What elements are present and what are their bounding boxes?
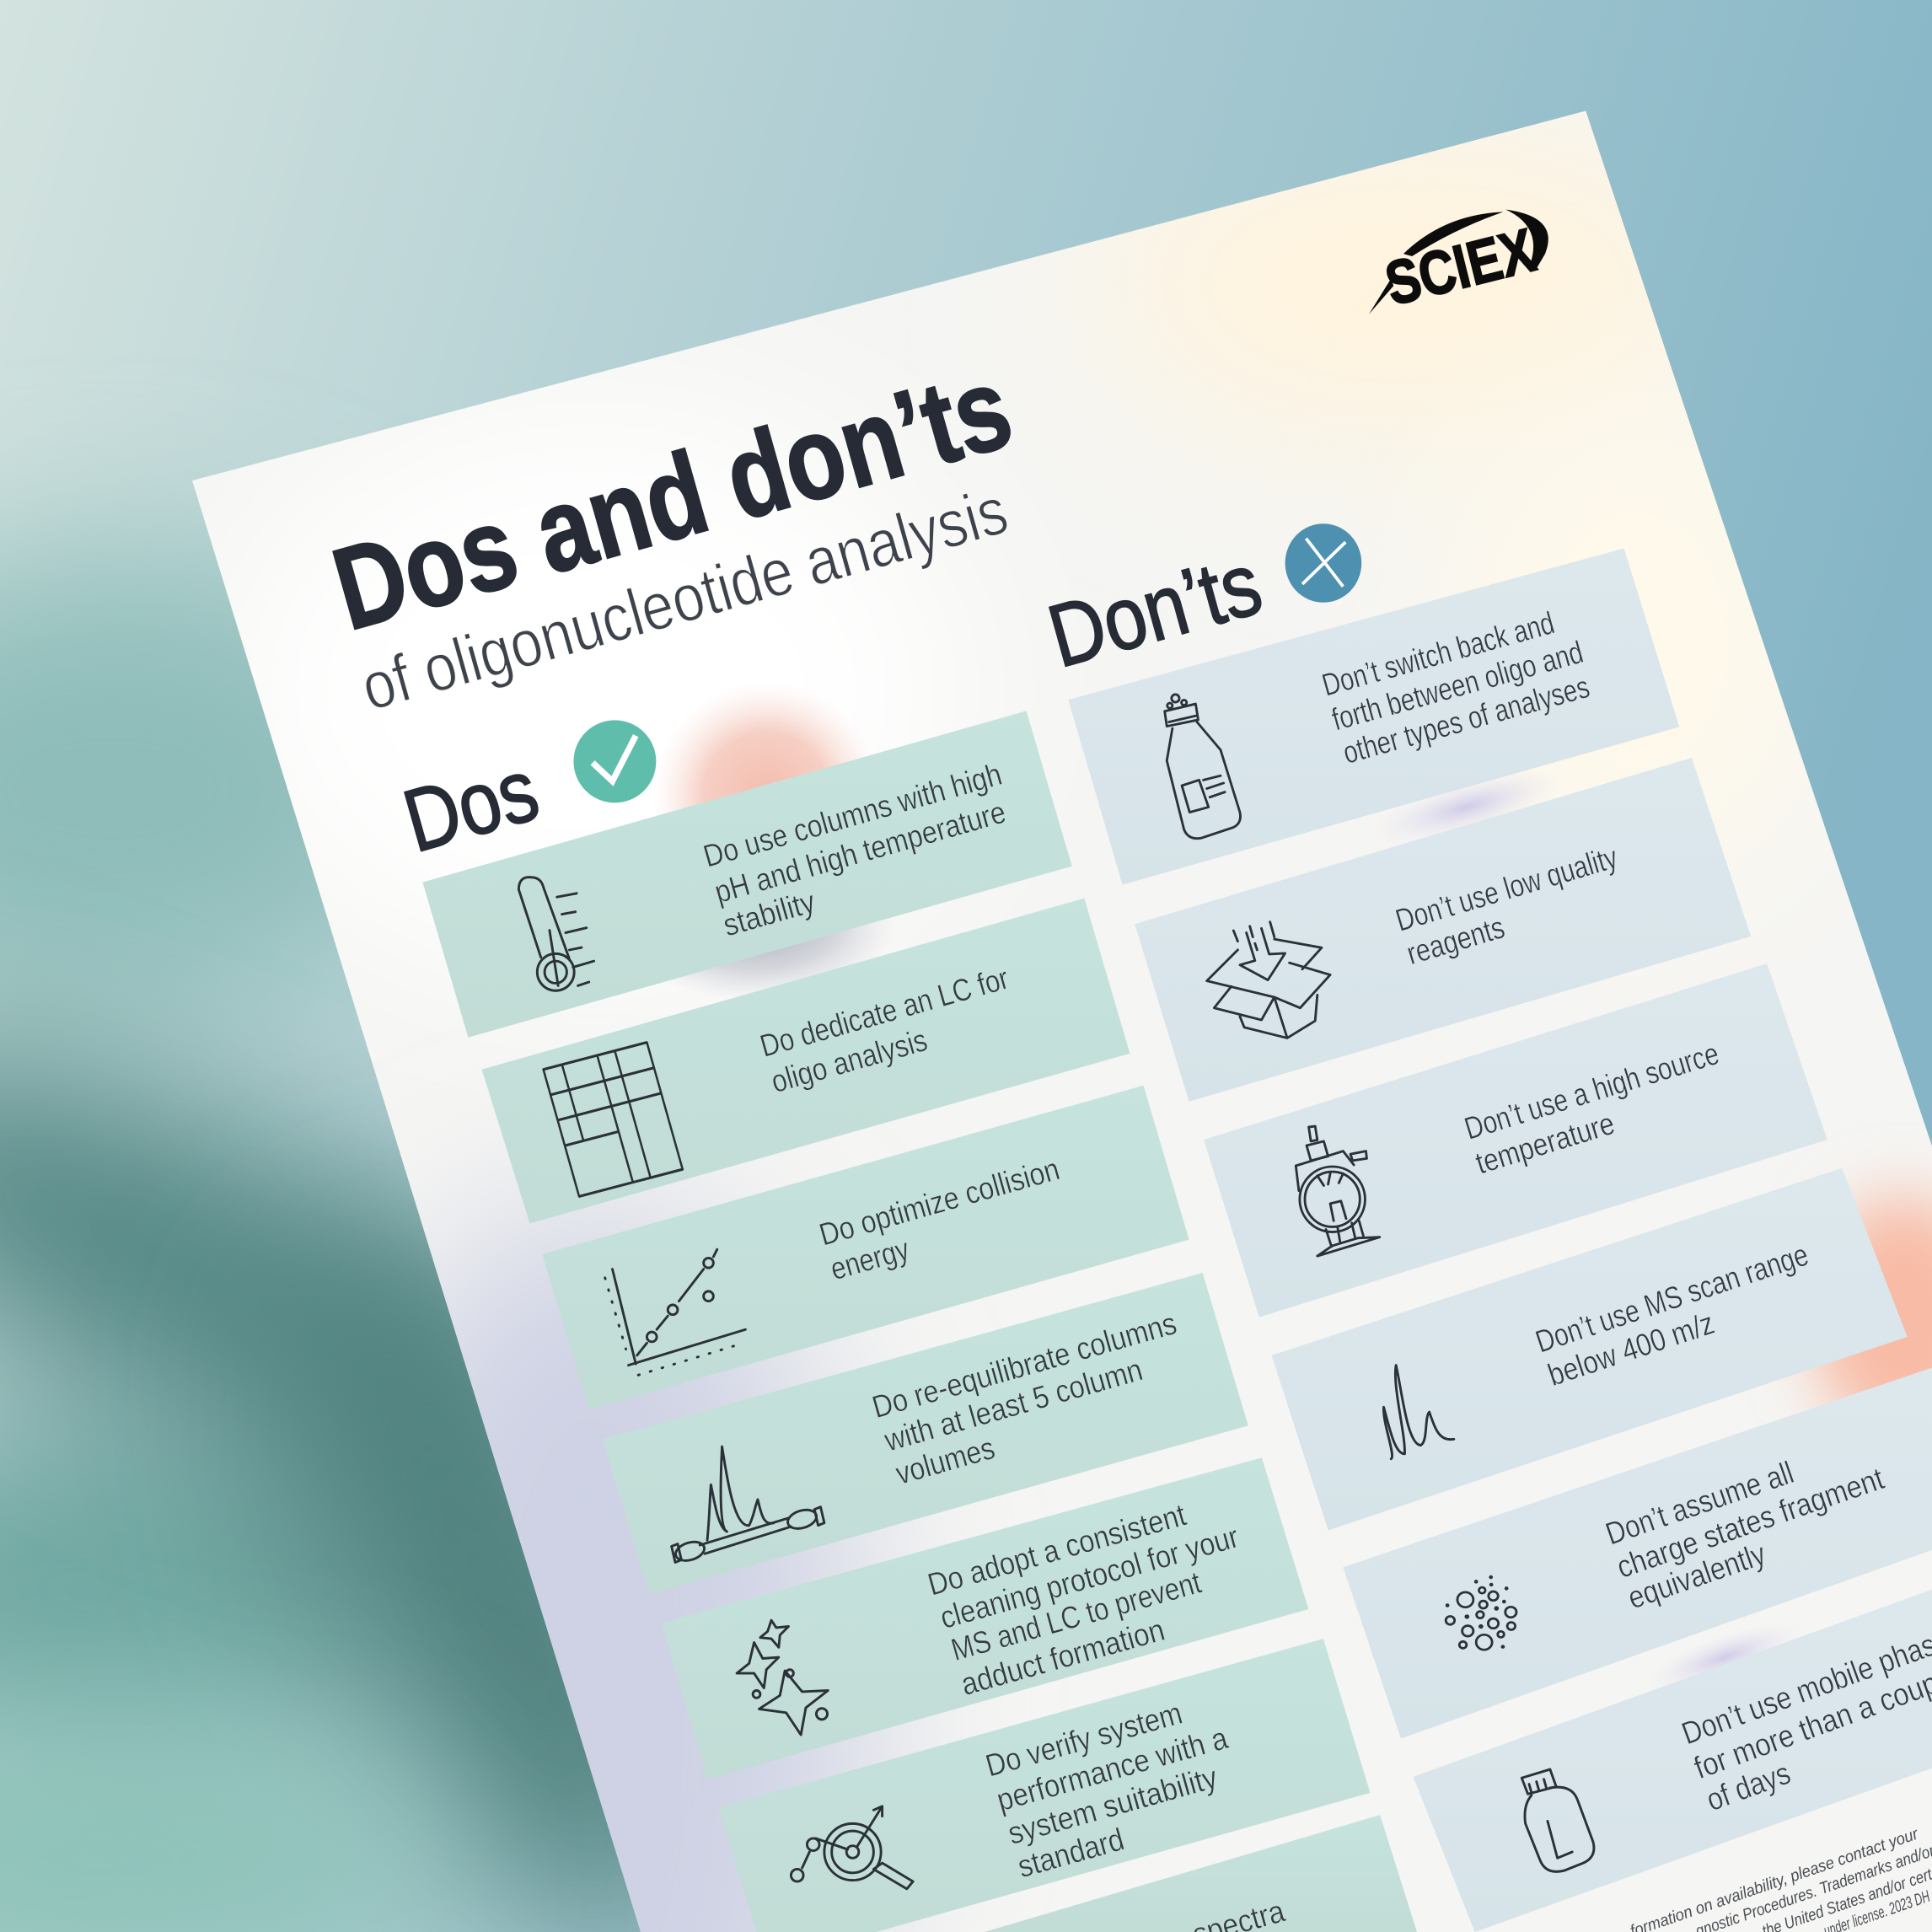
title: Dos and don’ts xyxy=(320,341,1024,655)
text: performance with a xyxy=(993,1720,1232,1817)
panel: don't 6 xyxy=(1414,1590,1932,1932)
text: stability xyxy=(719,883,819,943)
icon: check badge xyxy=(573,720,656,802)
text xyxy=(868,1305,1180,1491)
text: adduct formation xyxy=(957,1612,1168,1702)
text xyxy=(1531,1237,1812,1393)
text xyxy=(1318,604,1593,770)
icon: peaks xyxy=(1383,1366,1454,1459)
text: reagents xyxy=(1403,909,1508,971)
text xyxy=(700,756,1010,943)
panel: don't 3 xyxy=(1204,963,1827,1318)
text: system suitability xyxy=(1004,1759,1221,1851)
panel: don't 4 xyxy=(1272,1168,1908,1530)
icon: solvent bottle xyxy=(1165,695,1240,839)
text: Do optimize collision xyxy=(815,1151,1063,1253)
heading: Dos: Dos xyxy=(394,740,549,872)
text: Do verify system xyxy=(982,1695,1186,1784)
text xyxy=(756,960,1012,1099)
text: volumes xyxy=(892,1430,999,1491)
text xyxy=(1601,1454,1889,1616)
text: standard xyxy=(1014,1821,1128,1884)
text: other types of analyses xyxy=(1339,668,1593,770)
text: pH and high temperature xyxy=(711,794,1010,910)
text: Don’t switch back and xyxy=(1318,604,1558,703)
icon: chromatogram column xyxy=(672,1446,824,1564)
icon: cross badge xyxy=(1285,523,1361,603)
panel: do 3 xyxy=(542,1086,1189,1409)
icon: plate grid xyxy=(544,1043,683,1196)
icon: particle cluster xyxy=(1446,1575,1516,1650)
panel: do 5 xyxy=(662,1457,1308,1779)
text: with at least 5 column xyxy=(880,1351,1146,1458)
text: Do re-equilibrate columns xyxy=(868,1305,1180,1425)
panel: do 6 xyxy=(718,1639,1370,1932)
text: charge states fragment xyxy=(1613,1460,1889,1585)
panel: don't 5 xyxy=(1343,1368,1932,1739)
icon: ion source xyxy=(1296,1126,1380,1256)
icon: thermometer xyxy=(518,877,594,990)
logo: SCIEX: SCIEX xyxy=(1379,216,1542,319)
text: equivalently xyxy=(1623,1536,1770,1616)
text xyxy=(815,1151,1063,1286)
text: Do use columns with high xyxy=(700,756,1006,874)
text: forth between oligo and xyxy=(1328,634,1586,738)
text: below 400 m/z xyxy=(1543,1305,1719,1393)
panel: do 1 xyxy=(422,711,1072,1038)
text xyxy=(982,1695,1232,1884)
text: Don’t use a high source xyxy=(1460,1035,1723,1146)
text xyxy=(924,1496,1242,1702)
text: Don’t use low quality xyxy=(1392,839,1622,938)
panel: don't 2 xyxy=(1135,758,1751,1102)
panel: do 4 xyxy=(603,1273,1248,1594)
text: cleaning protocol for your xyxy=(936,1518,1242,1635)
subtitle: of oligonucleotide analysis xyxy=(353,473,1015,725)
text: oligo analysis xyxy=(767,1022,931,1099)
text: MS and LC to prevent xyxy=(947,1564,1205,1667)
text xyxy=(1392,839,1622,971)
icon: magnifier trend xyxy=(791,1806,913,1889)
text xyxy=(1460,1035,1723,1181)
text: temperature xyxy=(1472,1105,1618,1181)
text: Do adopt a consistent xyxy=(924,1496,1190,1602)
panel: do 7 xyxy=(985,1815,1417,1932)
text xyxy=(1677,1621,1932,1817)
text: of days xyxy=(1702,1755,1795,1817)
icon: scatter chart xyxy=(605,1249,745,1375)
panel: do 2 xyxy=(482,899,1130,1224)
text: Do dedicate an LC for xyxy=(756,960,1012,1064)
icon: sparkles xyxy=(737,1620,828,1735)
icon: small bottle xyxy=(1521,1769,1594,1871)
panel: don't 1 xyxy=(1068,548,1679,885)
icon: box with arrow xyxy=(1207,922,1330,1038)
heading: Don'ts: Don’ts xyxy=(1038,534,1271,686)
text: energy xyxy=(826,1231,913,1286)
text: Don’t use MS scan range xyxy=(1531,1237,1812,1360)
text: Don’t assume all xyxy=(1601,1454,1798,1552)
